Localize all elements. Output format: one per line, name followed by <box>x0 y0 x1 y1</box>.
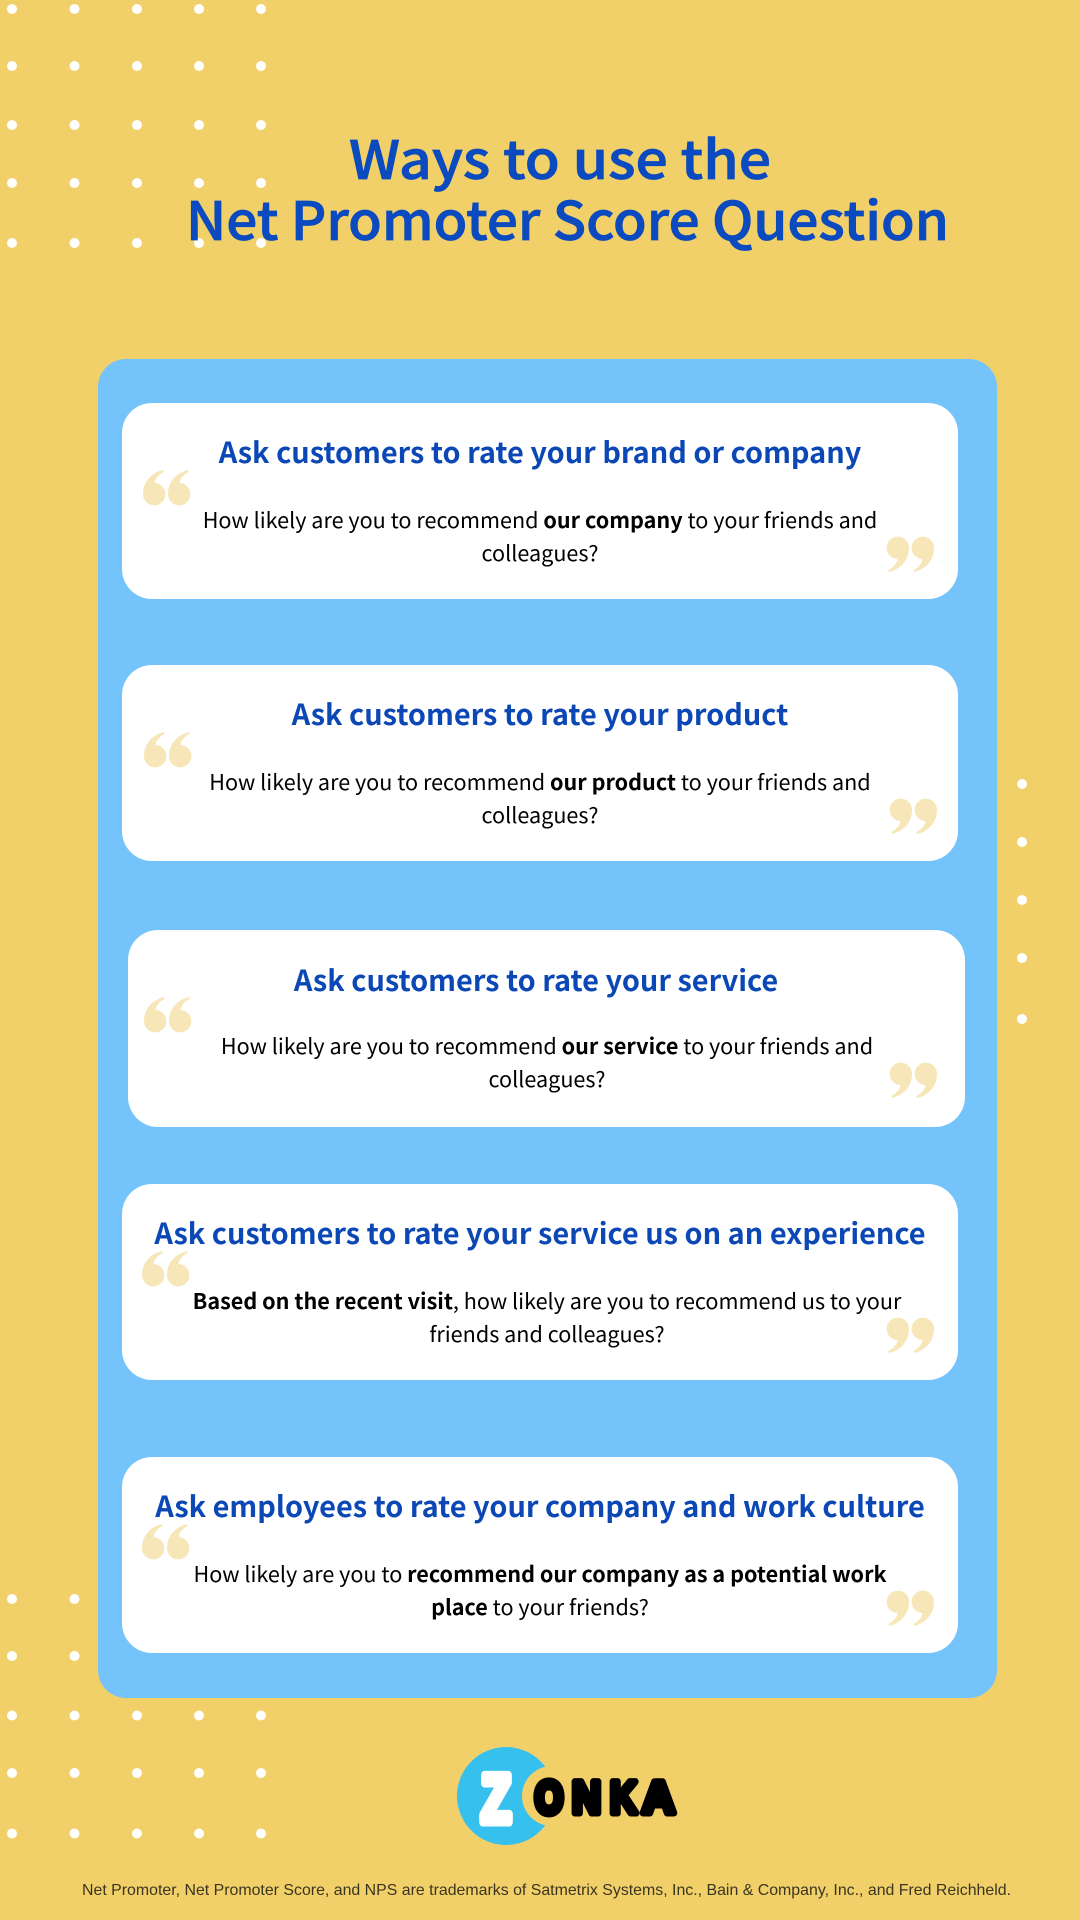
panel: question cards <box>98 359 997 1698</box>
icon: closing quote <box>887 537 934 572</box>
question text: our product: How likely are you to recommend our product to your friends and <box>209 766 871 797</box>
icon: closing quote <box>887 1318 934 1353</box>
footer: trademark note: Net Promoter, Net Promoter Score, and NPS are trademarks of Satmetrix Systems, Inc., Bain & Company, Inc., and Fred Reichheld. <box>82 1882 1011 1899</box>
question text: our service: colleagues? <box>489 1063 605 1094</box>
question text: our company <box>203 504 877 568</box>
card: employees <box>122 1457 958 1653</box>
card: brand or company <box>122 403 958 599</box>
logo: Zonka: N <box>572 1772 601 1823</box>
logo: Zonka: K <box>610 1772 637 1823</box>
question text: work place: place to your friends? <box>431 1591 649 1622</box>
heading: service: Ask customers to rate your service <box>293 958 778 1000</box>
icon: opening quote <box>144 997 191 1032</box>
icon: opening quote <box>142 1251 189 1286</box>
logo: Zonka: A <box>642 1772 675 1823</box>
logo: Zonka <box>457 1747 675 1845</box>
question text: recent visit <box>193 1285 902 1349</box>
title <box>186 119 949 256</box>
question text: recent visit: friends and colleagues? <box>429 1318 665 1349</box>
icon: closing quote <box>887 1591 934 1626</box>
icon: closing quote <box>890 799 937 834</box>
title: Ways to use the <box>349 119 771 195</box>
icon: opening quote <box>143 470 190 505</box>
card: product <box>122 665 958 861</box>
question text: our company: colleagues? <box>482 537 598 568</box>
question text: work place <box>193 1558 887 1622</box>
question text: our product <box>209 766 871 830</box>
heading: experience: Ask customers to rate your service us on an experience <box>153 1211 926 1253</box>
card: service <box>128 930 965 1127</box>
icon: closing quote <box>890 1063 937 1098</box>
heading: product: Ask customers to rate your product <box>291 692 788 734</box>
question text: our service: How likely are you to recommend our service to your friends and <box>221 1030 873 1061</box>
title: Net Promoter Score Question <box>186 180 949 256</box>
question text: our company: How likely are you to recommend our company to your friends and <box>203 504 877 535</box>
question text: our product: colleagues? <box>482 799 598 830</box>
heading: employees: Ask employees to rate your company and work culture <box>154 1484 925 1526</box>
question text: our service <box>221 1030 873 1094</box>
question text: work place: How likely are you to recommend our company as a potential work <box>193 1558 887 1589</box>
icon: opening quote <box>144 732 191 767</box>
question text: recent visit: Based on the recent visit, how likely are you to recommend us to your <box>193 1285 902 1316</box>
logo: Zonka: Z <box>481 1761 511 1837</box>
icon: opening quote <box>142 1524 189 1559</box>
logo: Zonka: O <box>535 1772 563 1823</box>
card: experience <box>122 1184 958 1380</box>
heading: brand or company: Ask customers to rate your brand or company <box>218 430 862 472</box>
